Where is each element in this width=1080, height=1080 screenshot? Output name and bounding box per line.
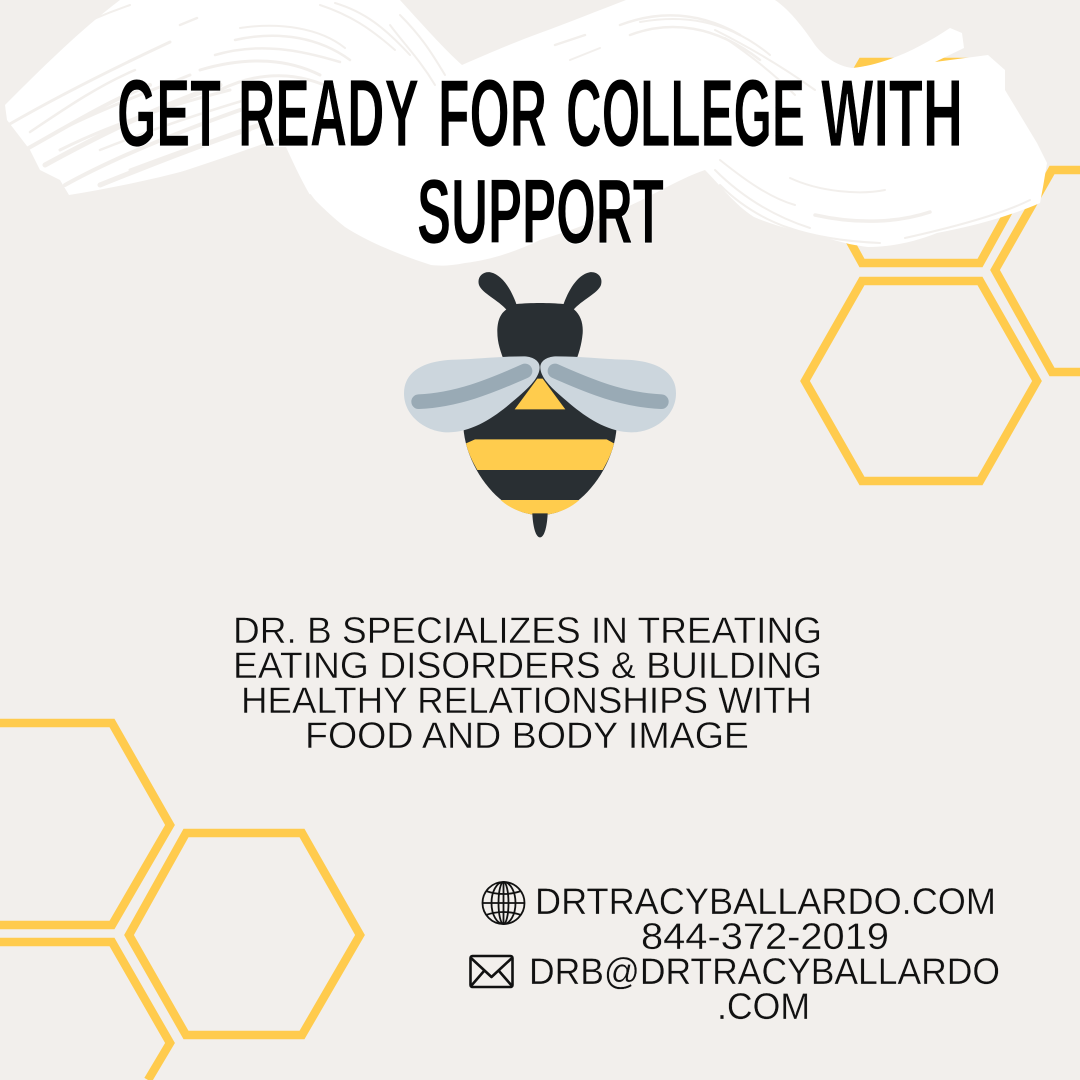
description text: DR. B SPECIALIZES IN TREATING	[233, 610, 822, 651]
title	[117, 60, 963, 263]
hexagons: bottom left cluster	[0, 723, 360, 1080]
bee thorax triangle	[515, 379, 565, 409]
bee stripe: tail	[501, 500, 579, 515]
contact text	[529, 881, 1000, 1027]
title: GET	[117, 60, 221, 167]
hexagons: top right cluster	[805, 62, 1080, 481]
white brush stroke	[5, 0, 1047, 266]
description text: EATING DISORDERS & BUILDING	[233, 645, 822, 686]
icon: globe	[482, 882, 524, 924]
description text: FOOD AND BODY IMAGE	[305, 715, 749, 756]
icon: envelope	[470, 956, 512, 987]
title: SUPPORT	[417, 161, 664, 263]
bee abdomen	[463, 370, 617, 515]
contact text: 844-372-2019	[641, 916, 889, 957]
title: READY	[238, 60, 419, 167]
description text	[233, 610, 822, 756]
bee left wing	[404, 356, 540, 432]
icon: bee	[404, 272, 676, 537]
bee stinger	[532, 513, 548, 537]
bee antennae	[478, 272, 602, 310]
bee stripe: middle	[466, 439, 614, 470]
contact text: DRTRACYBALLARDO.COM	[535, 881, 996, 922]
title: WITH	[821, 60, 963, 167]
title: COLLEGE	[566, 60, 805, 167]
bee wing veins	[419, 371, 661, 402]
description text: HEALTHY RELATIONSHIPS WITH	[241, 680, 812, 721]
contact text: DRB@DRTRACYBALLARDO	[529, 951, 1000, 992]
bee head	[497, 303, 583, 393]
title: FOR	[438, 60, 547, 167]
contact text: .COM	[717, 986, 810, 1027]
bee right wing	[540, 356, 676, 432]
